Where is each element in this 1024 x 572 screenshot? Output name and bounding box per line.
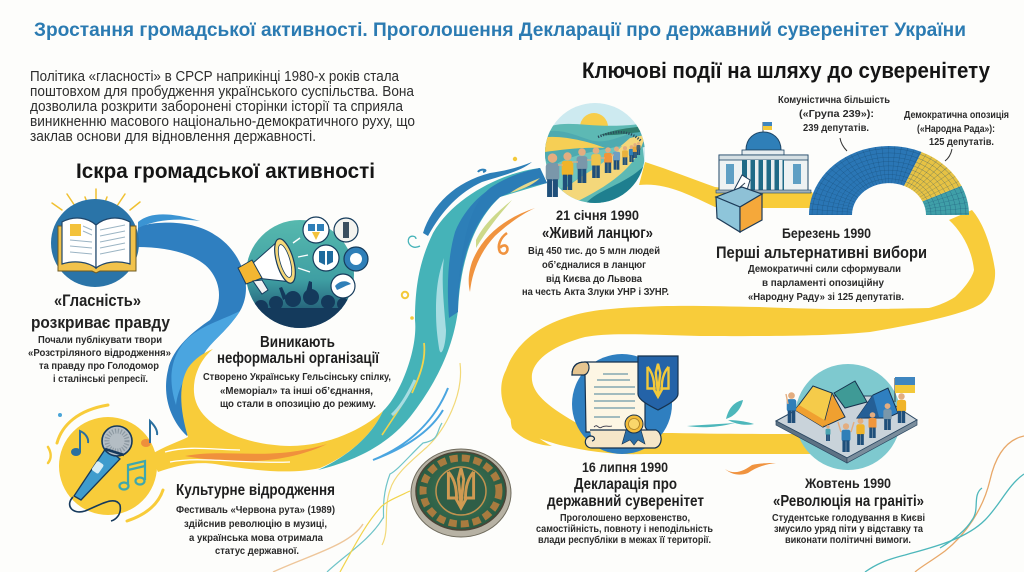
text: living chain [522, 207, 669, 298]
leader lines [840, 138, 952, 161]
text: declaration of sovereignty: Декларація про [574, 476, 677, 493]
label: democratic opposition: 125 депутатів. [929, 137, 994, 148]
icon: bronze trident medallion [411, 449, 511, 537]
label: democratic opposition [904, 110, 1009, 148]
icon: tent camp on granite [776, 364, 917, 470]
text: revolution on granite: змусило уряд піти у відставку та [774, 524, 923, 535]
icon: open book [51, 189, 140, 287]
label: communist majority: Комуністична більшість [778, 94, 890, 106]
text: Glasnost: «Розстріляного відродження» [28, 348, 171, 359]
intro paragraph [30, 69, 415, 145]
text: revolution on granite: Студентське голодування в Києві [772, 513, 925, 524]
ribbon: blue wave [137, 214, 246, 436]
text: first alternative elections: Демократичні сили сформували [748, 263, 901, 275]
text: living chain: 21 січня 1990 [556, 207, 639, 223]
icon: parliament building [716, 122, 811, 193]
label: democratic opposition: («Народна Рада»): [917, 124, 995, 135]
icon: living chain scene [545, 103, 645, 203]
icon: microphone and notes [48, 405, 163, 521]
label: communist majority: 239 депутатів. [803, 123, 869, 134]
text: informal organisations: Виникають [260, 334, 335, 351]
intro paragraph: дозволила розкрити заборонені сторінки історії та сприяла [30, 99, 404, 115]
text: revolution on granite: Жовтень 1990 [804, 475, 891, 491]
decorative curves bottom right [865, 436, 1024, 572]
text: living chain: об’єдналися в ланцюг [542, 259, 647, 271]
text: declaration of sovereignty: Проголошено верховенство, [560, 513, 690, 524]
text: cultural revival: здійснив революцію в музиці, [184, 519, 327, 530]
text: living chain: на честь Акта Злуки УНР і ЗУНР. [522, 287, 669, 298]
icon: declaration scroll and shield [572, 354, 678, 454]
text: Glasnost: та правду про Голодомор [39, 361, 159, 372]
text: informal organisations [203, 334, 391, 410]
text: revolution on granite: виконати політичні вимоги. [785, 535, 911, 546]
text: living chain: «Живий ланцюг» [542, 225, 653, 242]
text: cultural revival: Фестиваль «Червона рута» (1989) [176, 505, 335, 516]
heading: key events: Ключові події на шляху до суверенітету [582, 58, 991, 83]
text: Glasnost: і сталінські репресії. [53, 374, 148, 385]
text: first alternative elections: в парламенті опозиційну [762, 278, 884, 289]
ribbon: teal swirl [318, 162, 547, 470]
text: informal organisations: «Меморіал» та інші об’єднання, [220, 385, 373, 397]
text: cultural revival: Культурне відродження [176, 482, 335, 499]
flourish: teal leaf [687, 400, 754, 427]
title: Зростання громадської активності. Проголошення Декларації про державний суверенітет України [34, 20, 966, 41]
flourish: orange curl [402, 157, 535, 320]
text: declaration of sovereignty [536, 459, 713, 546]
heading: spark of civic activity: Іскра громадської активності [76, 160, 375, 183]
organisation badges [303, 217, 368, 298]
text: first alternative elections: Березень 1990 [782, 225, 871, 241]
ribbon: yellow wave [150, 349, 383, 472]
icon: megaphone and crowd [238, 217, 368, 332]
text: living chain: Від 450 тис. до 5 млн людей [528, 246, 660, 257]
ribbon: yellow main road [501, 162, 995, 454]
label: democratic opposition: Демократична опозиція [904, 110, 1009, 121]
text: declaration of sovereignty: 16 липня 1990 [582, 459, 668, 475]
intro paragraph: заклав основи для відновлення державності. [30, 129, 316, 145]
text: declaration of sovereignty: самостійність, повноту і неподільність [536, 524, 713, 535]
text: first alternative elections: «Народну Раду» зі 125 депутатів. [748, 292, 904, 303]
text: Glasnost: «Гласність» [54, 292, 141, 310]
text: revolution on granite [772, 475, 925, 546]
chain of people [546, 142, 640, 197]
label: communist majority: («Група 239»): [799, 109, 874, 120]
flourish: orange leaf [725, 463, 776, 475]
text: declaration of sovereignty: державний суверенітет [547, 493, 704, 510]
text: cultural revival [176, 482, 335, 557]
text: informal organisations: неформальні організації [217, 350, 380, 367]
label: communist majority [778, 94, 890, 134]
intro paragraph: Політика «гласності» в СРСР наприкінці 1980-х років стала [30, 69, 400, 85]
text: living chain: від Києва до Львова [546, 274, 642, 285]
text: Glasnost: розкриває правду [31, 313, 170, 332]
text: declaration of sovereignty: влади республіки в межах її території. [538, 534, 711, 546]
text: first alternative elections [716, 225, 927, 303]
text: cultural revival: статус державної. [215, 546, 299, 557]
chart: parliament seats hemicycle [812, 149, 966, 215]
icon: ballot box [716, 175, 762, 232]
text: informal organisations: що стали в опозицію до режиму. [220, 399, 376, 410]
intro paragraph: поштовхом для пробудження українського суспільства. Вона [30, 84, 415, 100]
intro paragraph: виникненню масового національно-демократичного руху, що [30, 114, 415, 130]
decorative thin lines near medallion [273, 363, 461, 572]
text: Glasnost [28, 292, 171, 385]
text: cultural revival: а українська мова отримала [189, 533, 323, 544]
text: Glasnost: Почали публікувати твори [38, 334, 162, 346]
text: first alternative elections: Перші альтернативні вибори [716, 243, 927, 262]
text: revolution on granite: «Революція на граніті» [773, 493, 924, 510]
text: informal organisations: Створено Українську Гельсінську спілку, [203, 372, 391, 383]
